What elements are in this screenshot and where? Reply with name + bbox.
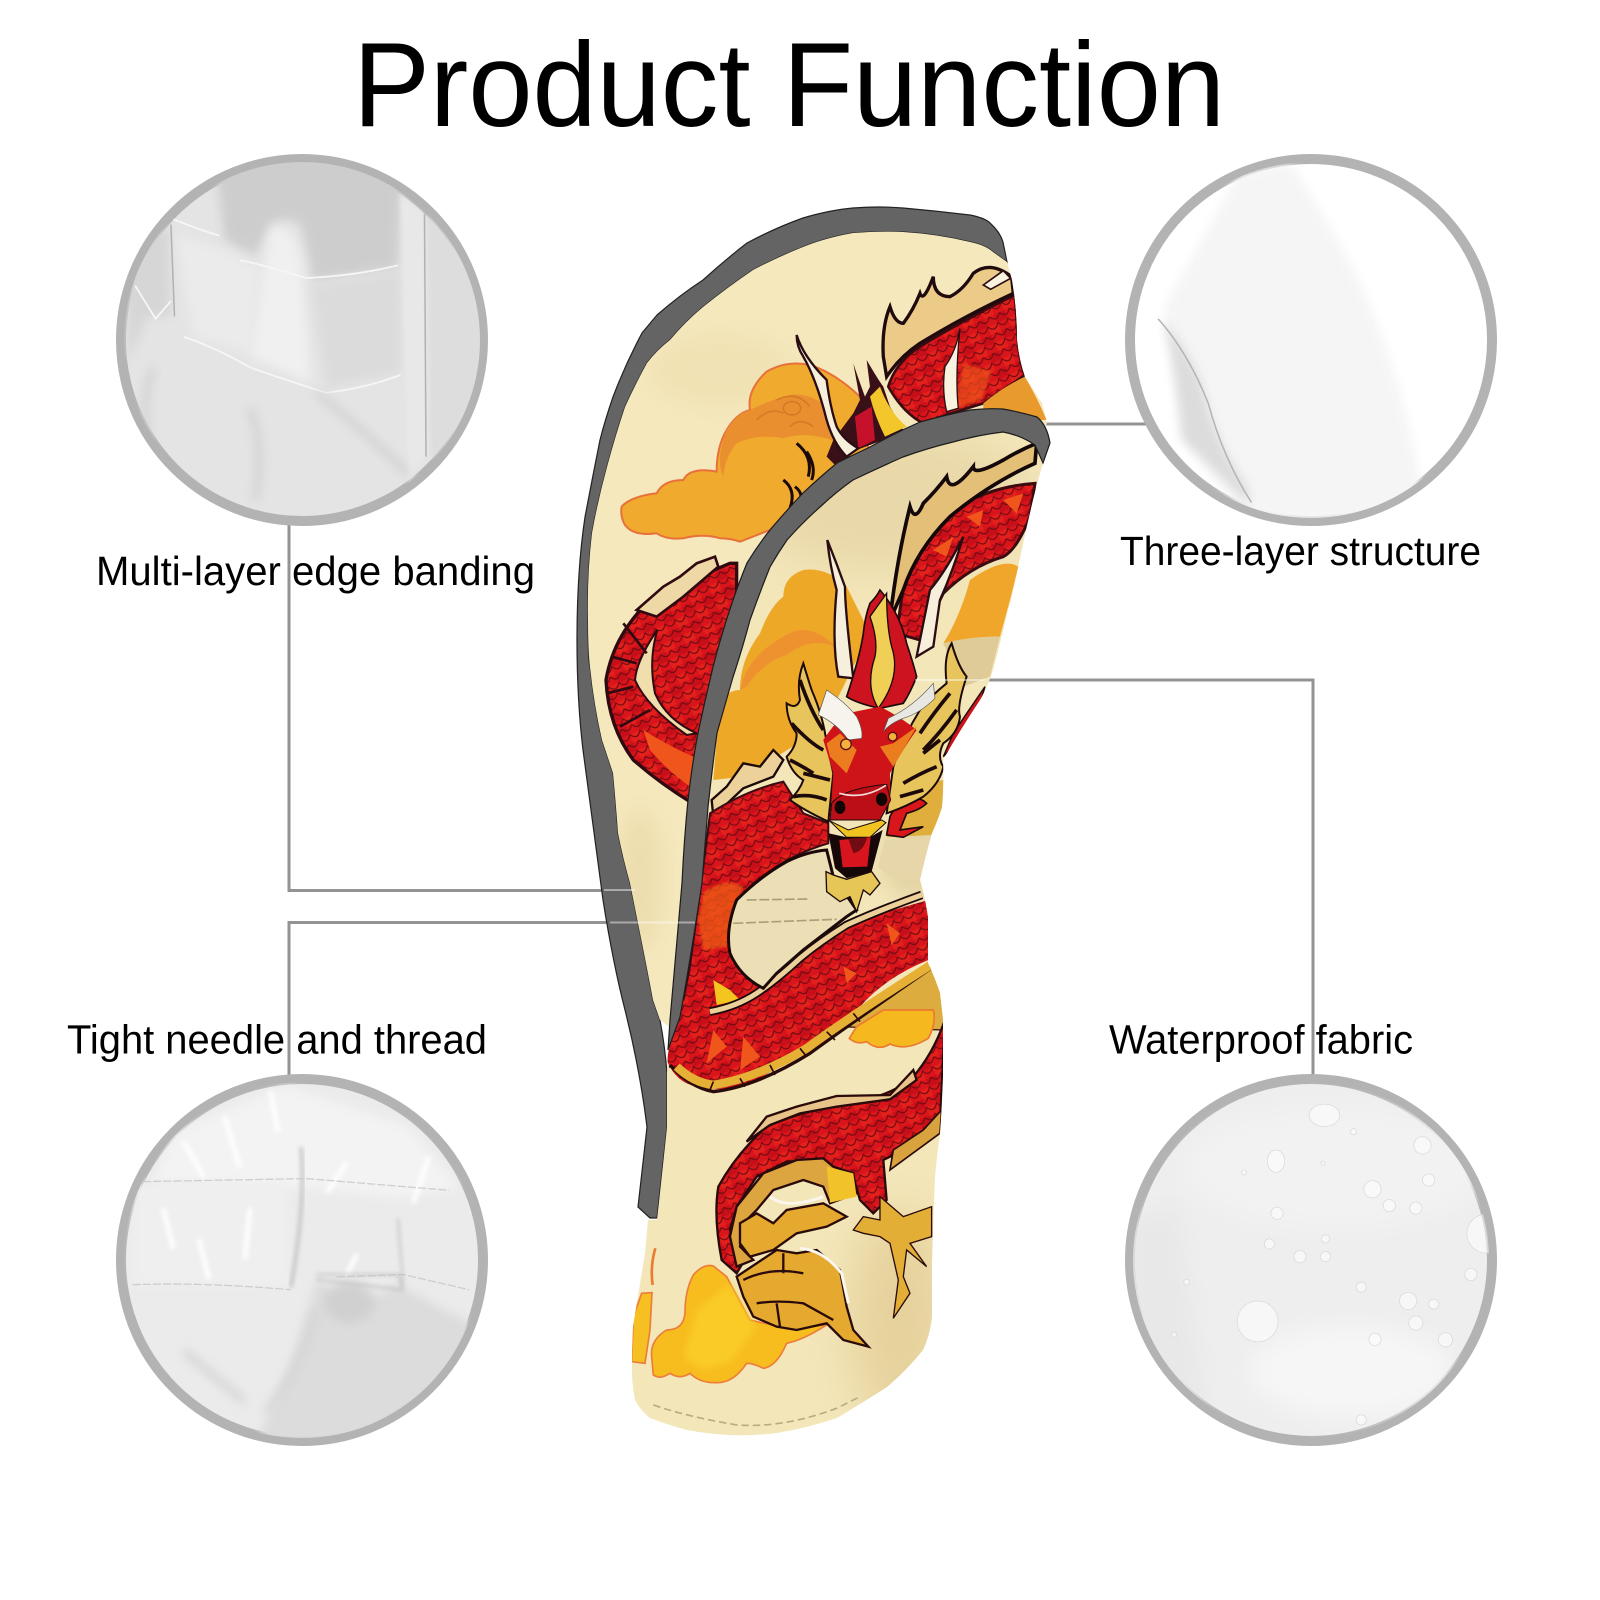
- front cloud: [713, 570, 870, 780]
- left shadow: [128, 224, 171, 362]
- connector lines: [289, 424, 1313, 1075]
- right panel: [428, 214, 490, 459]
- mane right: [887, 643, 967, 813]
- left bottom cloud: [632, 1293, 652, 1363]
- back cloud: [621, 363, 870, 542]
- detail circle: three-layer structure: [1130, 159, 1492, 521]
- cream hole: [728, 850, 857, 988]
- detail circle: tight needle and thread: [121, 1079, 483, 1443]
- fold center: [250, 228, 311, 383]
- left edge sliver: [652, 1248, 655, 1285]
- mouth: [828, 830, 883, 878]
- stitches: [133, 1179, 469, 1290]
- lower fold: [311, 270, 401, 388]
- glossy highlights: [163, 1091, 429, 1280]
- main body spine: [710, 895, 922, 1012]
- bottom cloud: [652, 1265, 827, 1383]
- step shadow: [316, 1218, 403, 1290]
- stitches: [135, 219, 401, 393]
- dark seam: [1158, 319, 1252, 503]
- bright top: [153, 1086, 459, 1198]
- mane left: [787, 663, 833, 822]
- nostrils: [835, 793, 887, 814]
- belly ticks: [710, 1013, 860, 1090]
- detail circle: multi-layer edge banding: [121, 153, 490, 521]
- lower fold shading: [145, 367, 408, 500]
- mane right streaks: [900, 693, 957, 797]
- front horn left: [827, 540, 853, 678]
- left shade: [1127, 1203, 1208, 1422]
- right gold cheek: [887, 780, 943, 837]
- body yellow flecks: [713, 980, 740, 1005]
- back coil outer segments: [607, 623, 650, 727]
- left body: [670, 782, 828, 1067]
- fabric tone: [1165, 163, 1428, 520]
- title: Product Function: [353, 18, 1225, 152]
- fold: [291, 1147, 302, 1287]
- front horn right: [917, 537, 963, 657]
- back coil: [606, 563, 737, 802]
- back small spikes: [783, 443, 813, 508]
- tail spine: [747, 1070, 917, 1142]
- front fin: [890, 443, 1037, 620]
- label: multi-layer edge banding: Multi-layer edge banding: [96, 548, 535, 594]
- drape lines: [184, 1310, 316, 1412]
- yellow leg: [827, 1167, 857, 1203]
- back cloud shade: [720, 395, 840, 477]
- skirt stitches: [653, 1397, 860, 1425]
- main belly gold: [677, 963, 933, 1085]
- seam lines: [171, 214, 426, 457]
- right strip: [401, 194, 426, 485]
- back coil spine: [637, 557, 718, 617]
- water droplets: [1171, 1104, 1506, 1425]
- body orange: [698, 883, 743, 950]
- back fin tip: [983, 271, 1011, 289]
- snout: [830, 784, 891, 820]
- tail red: [716, 1020, 945, 1273]
- upper gold belly: [837, 967, 945, 1030]
- back cloud swirls: [757, 396, 813, 427]
- back panel edge binding: [577, 207, 1007, 1218]
- back dark spikes: [827, 360, 903, 467]
- front upper body: [897, 483, 1035, 640]
- right cloud lower fabric: [943, 637, 1000, 687]
- fin white edge: [770, 1197, 848, 1303]
- detail circle: waterproof fabric: [1127, 1079, 1506, 1441]
- upper sheen: [1183, 1106, 1489, 1229]
- upper tail fin: [740, 1203, 847, 1257]
- mane left streaks: [790, 680, 830, 800]
- label: waterproof fabric: Waterproof fabric: [1109, 1016, 1413, 1062]
- front panel edge binding: [668, 409, 1050, 1050]
- back orange edge: [983, 377, 1047, 420]
- main body: [667, 900, 928, 1089]
- main belly edge: [670, 967, 933, 1092]
- back crest flame: [870, 387, 907, 437]
- back coil orange: [643, 730, 693, 787]
- upper yellow cloud: [849, 1010, 934, 1047]
- stitches: [733, 899, 837, 923]
- hollow: [324, 1282, 375, 1323]
- inner gold belly arc: [730, 1158, 857, 1267]
- palate: [848, 837, 867, 853]
- crest: [847, 590, 917, 708]
- brow right: [883, 683, 935, 732]
- bright panel: [133, 1183, 291, 1285]
- crest flame: [870, 593, 895, 708]
- right face fabric: [878, 838, 935, 880]
- back coil belly edge: [635, 630, 697, 735]
- brow left: [818, 690, 862, 740]
- faint lines across product: [604, 680, 985, 922]
- lower shade: [255, 1280, 474, 1443]
- edge shadow: [1162, 316, 1249, 505]
- lower light: [1249, 1326, 1453, 1417]
- face: [823, 707, 917, 820]
- top fold shadow: [214, 153, 403, 281]
- beard: [826, 872, 880, 912]
- eye patches: [827, 727, 917, 773]
- side red fragment: [943, 687, 985, 757]
- red cheek: [887, 797, 927, 837]
- label: tight needle and thread: Tight needle and thread: [67, 1016, 487, 1062]
- upper lip: [829, 820, 886, 837]
- back horn: [797, 335, 858, 457]
- snout highlight: [839, 785, 886, 795]
- back body highlight: [953, 363, 992, 410]
- upper body orange flecks: [933, 493, 1023, 557]
- fin lines: [743, 1253, 833, 1327]
- foot: [853, 1197, 932, 1318]
- back crest red: [855, 407, 875, 448]
- main body spine tan: [710, 895, 922, 1012]
- back fin: [883, 267, 1013, 377]
- bottom cloud deep: [683, 1283, 757, 1370]
- product: dragon headcover: [570, 200, 1070, 1450]
- back panel fabric with upper dragon: [588, 232, 1047, 1027]
- main body flecks: [707, 923, 900, 1070]
- eyes: [841, 732, 897, 750]
- back horn right: [944, 328, 960, 412]
- right cloud: [943, 564, 1018, 643]
- left main spine: [712, 750, 783, 817]
- front panel and lower body: [632, 436, 1043, 1436]
- front cloud shade: [740, 630, 837, 690]
- lower tail fin: [737, 1250, 868, 1347]
- label: three-layer structure: Three-layer structure: [1120, 528, 1481, 574]
- back body: [888, 295, 1025, 423]
- belly segments: [890, 1110, 942, 1170]
- bright drape: [176, 235, 260, 352]
- tongue: [839, 837, 871, 867]
